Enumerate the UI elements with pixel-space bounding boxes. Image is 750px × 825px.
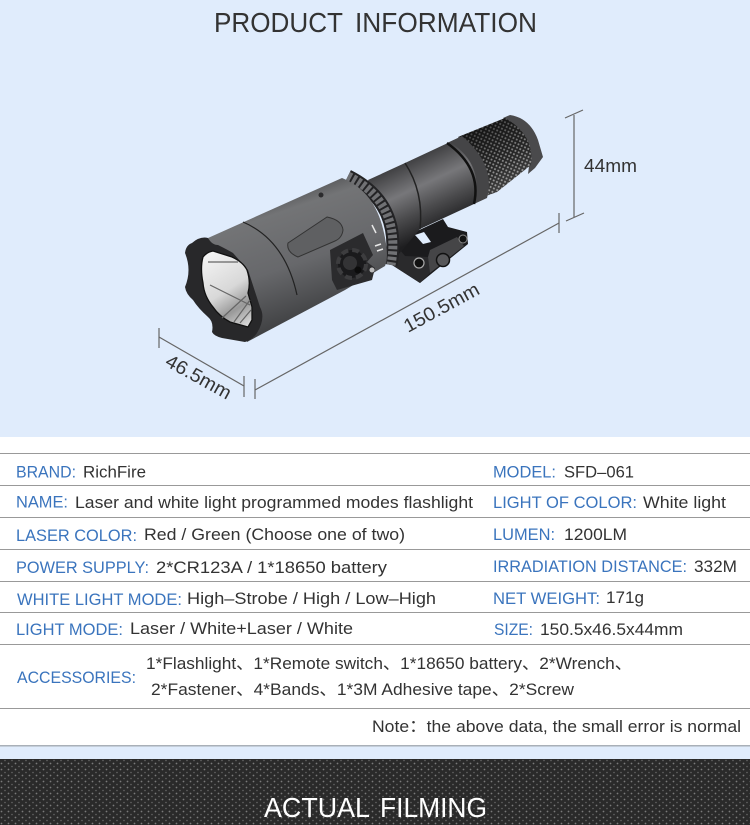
spec rows left: RichFire xyxy=(83,462,146,482)
title xyxy=(214,7,537,38)
spec rows left: NAME: xyxy=(16,492,68,512)
spec rows left: POWER SUPPLY: xyxy=(16,558,149,577)
dimension: height 44mm: 44mm xyxy=(584,156,637,176)
panel: product image background xyxy=(0,0,750,437)
accessories row: ACCESSORIES: xyxy=(17,668,136,687)
banner heading xyxy=(264,792,487,823)
panel: specification table xyxy=(0,437,750,745)
dimension: length 150.5mm: 150.5mm xyxy=(400,279,483,337)
panel: actual filming banner xyxy=(0,759,750,825)
spec rows left: High–Strobe / High / Low–High xyxy=(187,589,436,608)
accessories row xyxy=(17,654,632,699)
banner heading: ACTUAL xyxy=(264,792,370,823)
spec rows left: WHITE LIGHT MODE: xyxy=(17,590,182,609)
spec rows right: 171g xyxy=(606,588,644,607)
spacer strip xyxy=(0,745,750,759)
scalloped bezel xyxy=(185,238,262,342)
spec rows right: 150.5x46.5x44mm xyxy=(540,620,683,639)
dimension: width 46.5mm: 46.5mm xyxy=(162,351,235,404)
top hole xyxy=(318,192,324,198)
switch recess xyxy=(288,217,343,257)
main body xyxy=(208,178,387,342)
dimension: height 44mm xyxy=(565,110,637,221)
spec rows right: White light xyxy=(643,493,726,512)
dimension: length 150.5mm xyxy=(255,213,559,399)
tail cap xyxy=(447,115,543,204)
knurled ring xyxy=(348,176,393,265)
spec rows left: Laser and white light programmed modes flashlight xyxy=(75,493,473,512)
spec rows right: LIGHT OF COLOR: xyxy=(493,493,637,512)
accessories row: 2*Fastener、4*Bands、1*3M Adhesive tape、2*Screw xyxy=(151,680,575,699)
spec rows left: BRAND: xyxy=(16,462,76,482)
spec rows right: IRRADIATION DISTANCE: xyxy=(493,557,687,576)
spec rows right xyxy=(493,462,737,639)
tube sections xyxy=(368,142,477,255)
mount xyxy=(392,219,468,283)
spec rows left: Red / Green (Choose one of two) xyxy=(144,525,405,544)
spec rows right: SFD–061 xyxy=(564,462,634,482)
seam xyxy=(243,222,297,295)
spec rows left: LASER COLOR: xyxy=(16,526,137,545)
spec rows right: SIZE: xyxy=(494,620,533,639)
accessories row: 1*Flashlight、1*Remote switch、1*18650 battery、2*Wrench、 xyxy=(146,654,632,673)
spec rows right: NET WEIGHT: xyxy=(493,589,600,608)
spec rows left: Laser / White+Laser / White xyxy=(130,619,353,638)
note: Note：the above data, the small error is normal xyxy=(372,717,741,736)
dimension: width 46.5mm xyxy=(159,328,244,404)
side plate and knob xyxy=(330,225,383,290)
spec rows left: LIGHT MODE: xyxy=(16,620,123,639)
flashlight xyxy=(185,115,543,342)
title: INFORMATION xyxy=(355,7,537,38)
title: PRODUCT xyxy=(214,7,343,38)
spec rows right: 1200LM xyxy=(564,525,627,544)
spec rows right: MODEL: xyxy=(493,462,556,482)
spec rows left xyxy=(16,462,473,639)
spec rows left: 2*CR123A / 1*18650 battery xyxy=(156,558,388,577)
banner heading: FILMING xyxy=(380,792,487,823)
lens xyxy=(202,251,252,327)
spec rows right: 332M xyxy=(694,557,737,576)
spec rows right: LUMEN: xyxy=(493,525,555,544)
